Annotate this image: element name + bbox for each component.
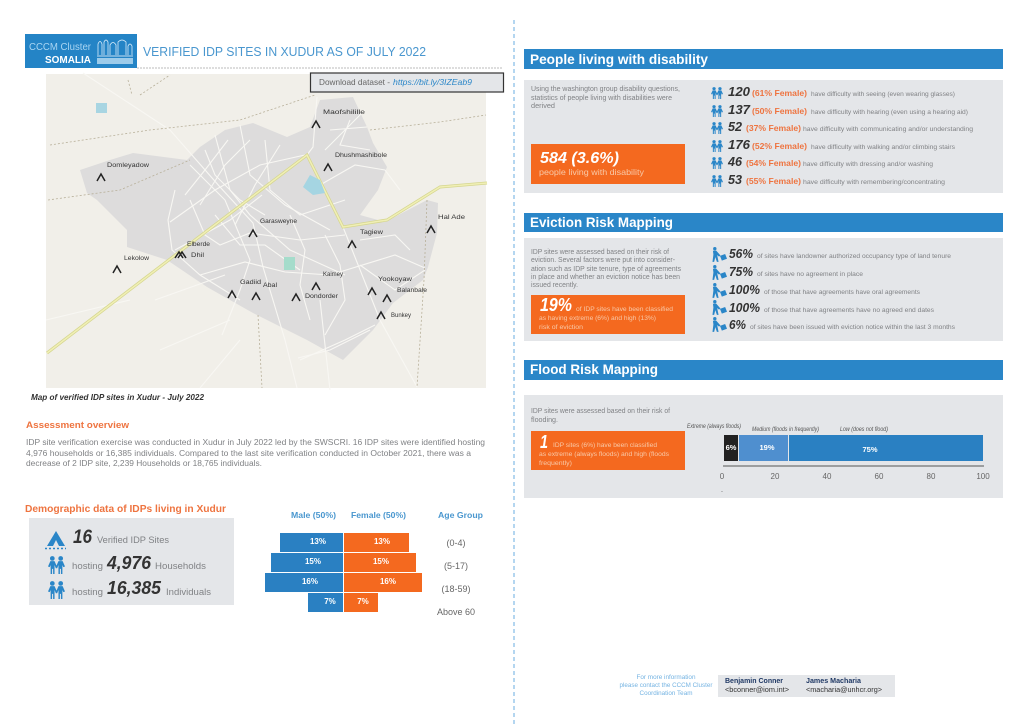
panel: assessment overview: IDP site verification exercise was conducted in Xudur in July 2022 led by the SWSCRI. 16 IDP sites were identified hosting: [26, 438, 485, 447]
heading: eviction: [524, 213, 1003, 232]
list: disability types: (55% Female): [746, 176, 801, 186]
site labels: Tagiew: [360, 229, 383, 236]
panel: assessment overview: [26, 420, 485, 468]
chart: population pyramid: (0-4): [446, 538, 466, 548]
footer: contacts box: <bconner@iom.int>: [725, 687, 789, 694]
footer: contact note: please contact the CCCM Cluster: [620, 683, 712, 689]
chart: population pyramid: 15%: [373, 557, 389, 566]
site labels: Domleyadow: [107, 162, 149, 169]
panel: key demographic figures: Households: [155, 561, 207, 571]
heading: flood: Flood Risk Mapping: [530, 361, 658, 377]
site labels: Kaimey: [323, 271, 344, 278]
list: eviction statistics: 6%: [729, 317, 746, 332]
chart: flood risk stacked bar: 6%: [726, 443, 737, 452]
list: disability types: (50% Female): [752, 106, 807, 116]
download dataset box: Download dataset -: [319, 77, 390, 87]
site labels: Dhushmashibole: [335, 152, 387, 159]
list: disability types: [711, 84, 973, 187]
callout: 19 percent: 19%: [540, 295, 572, 315]
list: disability types: have difficulty with remembering/concentrating: [803, 179, 945, 186]
callout: 584 people with disability: [531, 144, 685, 184]
download dataset box: https://bit.ly/3IZEab9: [393, 77, 472, 87]
chart: population pyramid: (18-59): [441, 584, 471, 594]
site labels: Lekolow: [124, 255, 149, 262]
panel: key demographic figures: 16: [73, 527, 92, 548]
header rule: [137, 67, 502, 69]
site labels: Maofshilille: [323, 109, 365, 116]
chart: flood risk stacked bar: 100: [976, 472, 990, 481]
panel: key demographic figures: Individuals: [166, 587, 212, 597]
list: disability types: 53: [728, 172, 743, 187]
chart: population pyramid: 13%: [310, 537, 326, 546]
panel: assessment overview: 4,976 households or 16,385 individuals. Compared to the last site verification conducted in October 2021, there was a: [26, 449, 472, 458]
footer: contacts box: [718, 675, 895, 697]
site labels: Gadiid: [240, 279, 261, 286]
site labels: Yookoyaw: [378, 276, 412, 283]
chart: flood risk stacked bar: .: [721, 485, 723, 494]
panel: eviction risk mapping: in place and whether an eviction notice has been: [531, 274, 680, 281]
chart: population pyramid: 7%: [324, 597, 336, 606]
list: disability types: (37% Female): [746, 123, 801, 133]
map caption: Map of verified IDP sites in Xudur - July 2022: [31, 392, 204, 402]
chart: population pyramid: Female (50%): [351, 510, 406, 520]
list: disability types: 120: [728, 84, 751, 99]
list: disability types: 46: [727, 154, 743, 169]
list: disability types: 137: [728, 102, 751, 117]
panel: eviction risk mapping: eviction. Several factors were put into consider-: [531, 257, 676, 264]
panel: flood risk mapping: [524, 360, 1003, 498]
list: disability types: (52% Female): [752, 141, 807, 151]
list: disability types: have difficulty with walking and/or climbing stairs: [811, 144, 956, 151]
site labels: Elberde: [187, 241, 210, 248]
panel: people living with disability: statistics of people living with disabilities were: [531, 95, 672, 102]
panel: assessment overview: decrease of 2 IDP site, 2,239 Households or 18,765 individuals.: [26, 459, 262, 468]
panel: key demographic figures: [29, 518, 234, 605]
chart: population pyramid: [265, 510, 483, 617]
callout: 1 IDP site: 1: [540, 432, 548, 452]
footer: contact note: [620, 675, 712, 697]
site labels: Bunkey: [391, 312, 412, 319]
list: disability types: have difficulty with hearing (even using a hearing aid): [811, 109, 968, 116]
list: eviction statistics: of sites have been issued with eviction notice within the last 3 months: [750, 324, 956, 331]
map of verified IDP sites: [46, 73, 487, 390]
list: disability types: (54% Female): [746, 158, 801, 168]
list: disability types: 52: [728, 119, 743, 134]
heading: eviction: Eviction Risk Mapping: [530, 214, 673, 230]
list: eviction statistics: of those that have agreements have oral agreements: [764, 289, 921, 296]
footer: contacts box: James Macharia: [806, 678, 861, 685]
list: disability types: have difficulty with dressing and/or washing: [803, 161, 933, 168]
chart: flood risk stacked bar: Low (does not flood): [840, 427, 888, 433]
site markers: [97, 121, 435, 319]
column divider: [513, 20, 515, 724]
list: eviction statistics: of sites have no agreement in place: [757, 271, 863, 278]
chart: flood risk stacked bar: 80: [927, 472, 936, 481]
chart: flood risk stacked bar: 60: [875, 472, 884, 481]
list: eviction statistics: 100%: [729, 282, 760, 297]
logo: CCCM Cluster Somalia: CCCM Cluster: [29, 41, 91, 53]
list: eviction statistics: [712, 246, 956, 332]
chart: population pyramid: Age Group: [438, 510, 483, 520]
callout: 1 IDP site: [531, 431, 685, 470]
panel: eviction risk mapping: IDP sites were assessed based on their risk of: [531, 249, 669, 256]
list: eviction statistics: 75%: [729, 264, 753, 279]
chart: population pyramid: (5-17): [444, 561, 468, 571]
chart: population pyramid: 15%: [305, 557, 321, 566]
panel: key demographic figures: hosting: [72, 587, 103, 597]
title: VERIFIED IDP SITES IN XUDUR AS OF JULY 2022: [143, 44, 426, 59]
footer: contacts box: <macharia@unhcr.org>: [806, 687, 882, 694]
heading: disability: People living with disability: [530, 51, 708, 67]
chart: population pyramid: Male (50%): [291, 510, 336, 520]
callout: 19 percent: of IDP sites have been classified: [576, 306, 673, 313]
chart: flood risk stacked bar: 0: [720, 472, 725, 481]
chart: flood risk stacked bar: 19%: [759, 443, 775, 452]
chart: flood risk stacked bar: 20: [771, 472, 780, 481]
list: eviction statistics: 56%: [729, 246, 753, 261]
callout: 19 percent: risk of eviction: [539, 324, 583, 331]
callout: 1 IDP site: frequently): [539, 460, 572, 467]
panel: assessment overview: Assessment overview: [26, 420, 130, 431]
callout: 19 percent: as having extreme (6%) and high (13%): [539, 315, 656, 322]
heading: disability: [524, 49, 1003, 69]
site labels: [107, 109, 465, 319]
site labels: Balanbale: [397, 287, 427, 294]
list: eviction statistics: of sites have landowner authorized occupancy type of land tenure: [757, 253, 951, 260]
footer: contacts box: Benjamin Conner: [725, 678, 783, 685]
download dataset box: [310, 73, 504, 92]
site labels: Dhil: [191, 252, 205, 259]
panel: key demographic figures: 16,385: [107, 578, 162, 598]
list: eviction statistics: 100%: [729, 300, 760, 315]
list: disability types: 176: [728, 137, 751, 152]
chart: flood risk stacked bar: 75%: [862, 445, 878, 454]
panel: flood risk mapping: flooding.: [531, 417, 558, 424]
site labels: Abal: [263, 282, 278, 289]
site labels: Garasweyne: [260, 218, 297, 225]
footer: contact note: For more information: [636, 675, 696, 681]
chart: population pyramid: 16%: [380, 577, 396, 586]
chart: flood risk stacked bar: Extreme (always floods): [687, 424, 741, 430]
site labels: Hal Ade: [438, 214, 465, 221]
callout: 584 people with disability: 584 (3.6%): [540, 150, 619, 167]
callout: 19 percent: [531, 295, 685, 334]
chart: population pyramid: 7%: [357, 597, 369, 606]
icon: tent: [45, 531, 66, 548]
list: disability types: (61% Female): [752, 88, 807, 98]
callout: 584 people with disability: people living with disability: [539, 167, 645, 177]
logo: CCCM Cluster Somalia: SOMALIA: [45, 54, 91, 66]
list: eviction statistics: of those that have agreements have no agreed end dates: [764, 307, 935, 314]
list: disability types: have difficulty with communicating and/or understanding: [803, 126, 973, 133]
list: disability types: have difficulty with seeing (even wearing glasses): [811, 91, 955, 98]
panel: key demographic figures: Verified IDP Sites: [97, 535, 170, 545]
chart: flood risk stacked bar: [687, 424, 990, 494]
heading: flood: [524, 360, 1003, 380]
panel: people living with disability: Using the washington group disability questions,: [531, 86, 680, 93]
site labels: Dondorder: [305, 293, 339, 300]
logo: CCCM Cluster Somalia: [25, 34, 137, 68]
panel: key demographic figures: 4,976: [106, 553, 152, 573]
panel: eviction risk mapping: issued recently.: [531, 282, 578, 289]
panel: people living with disability: [524, 49, 1003, 193]
chart: flood risk stacked bar: 40: [823, 472, 832, 481]
chart: population pyramid: 13%: [374, 537, 390, 546]
heading: demographic data: Demographic data of IDPs living in Xudur: [25, 504, 226, 515]
panel: people living with disability: derived: [531, 103, 555, 110]
footer: contact note: Coordination Team: [640, 691, 692, 697]
chart: population pyramid: Above 60: [437, 607, 475, 617]
chart: population pyramid: 16%: [302, 577, 318, 586]
callout: 1 IDP site: IDP sites (6%) have been classified: [553, 442, 657, 449]
callout: 1 IDP site: as extreme (always floods) and high (floods: [539, 451, 670, 458]
panel: flood risk mapping: IDP sites were assessed based on their risk of: [531, 408, 670, 415]
panel: key demographic figures: hosting: [72, 561, 103, 571]
panel: eviction risk mapping: [524, 213, 1003, 341]
panel: eviction risk mapping: ation such as IDP site tenure, type of agreements: [531, 266, 681, 273]
chart: flood risk stacked bar: Medium (floods in frequently): [752, 427, 819, 433]
